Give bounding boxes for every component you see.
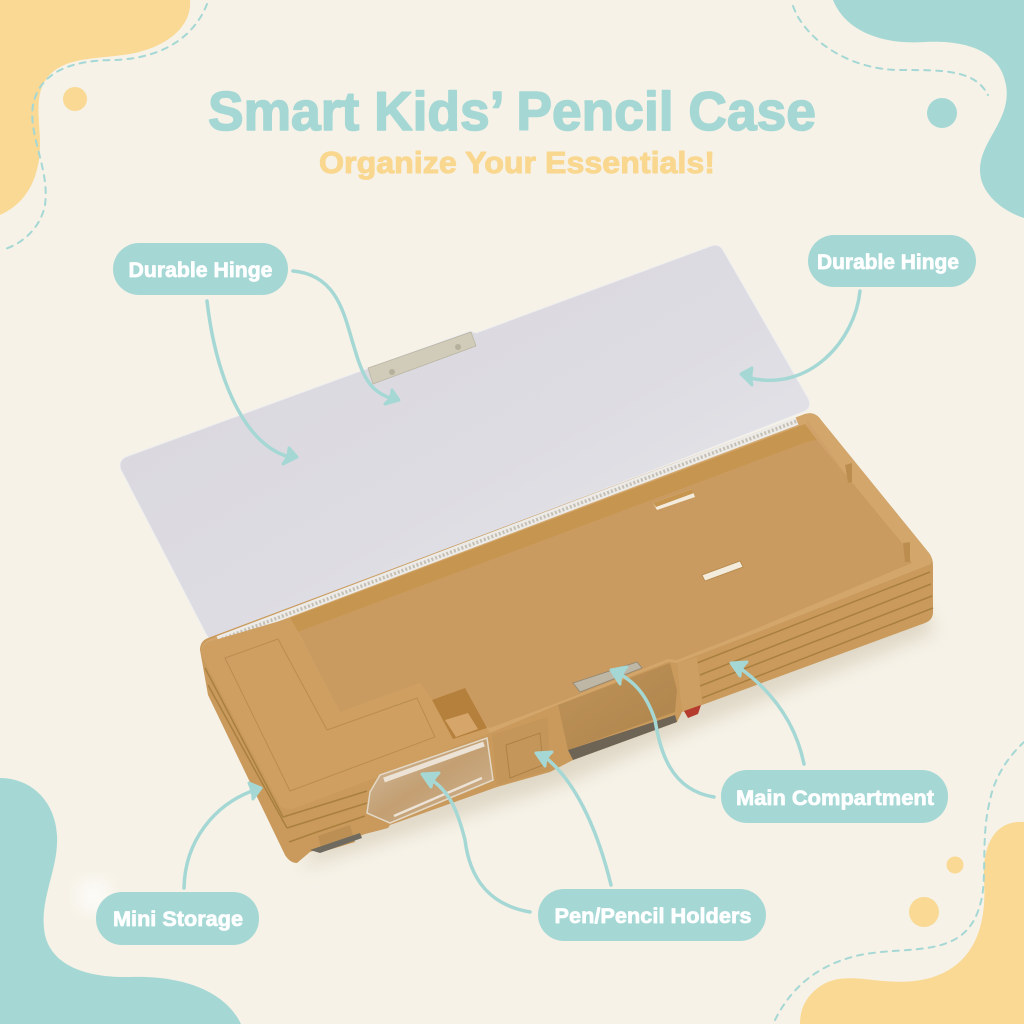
arrow: hinge left to plate [293,271,399,404]
notch opening [432,688,487,739]
metal clip [573,662,642,692]
title: Smart Kids’ Pencil Case [208,80,816,142]
arrow: hinge left to lid [207,301,297,464]
dashed line: top left [2,4,207,250]
arrow: main compartment to clip [611,667,714,797]
L-block inset [225,639,435,791]
arrow: mini storage to corner [184,783,261,888]
arrow: pen holders to clear clip [422,773,530,912]
label: durable hinge left [113,243,288,295]
label: mini storage [96,892,259,945]
right inner wall [807,420,910,563]
middle front block [558,663,677,750]
slot: back notch [653,489,695,510]
ridged section left column [677,657,702,712]
blob: bottom left [0,778,241,1024]
dot: bottom right large [909,897,939,927]
blob: top right [833,0,1024,218]
L-shaped block [202,618,490,809]
case top rim [201,413,932,809]
hinge teeth strip [218,421,797,640]
dashed line: bottom right lower [775,742,1024,1020]
wall notch step [653,489,694,507]
open lid [120,245,810,640]
subtitle: Organize Your Essentials! [319,145,715,180]
storage recess on corner [318,825,355,852]
label: pen/pencil holders: Pen/Pencil Holders [554,905,752,928]
red tab [684,705,701,718]
dot: bottom right small [946,856,964,874]
arrow: hinge right to lid [741,291,860,385]
slot: floor [702,561,743,581]
dark metal slot [568,715,677,760]
clear clip [367,738,493,823]
dashed line: top right [793,6,988,95]
hinge plate [368,332,476,384]
ridges: left front corner [205,668,367,842]
bottom metal [310,833,362,853]
label: main compartment [721,770,948,823]
arrow: main compartment to ridges [731,662,804,764]
case shadow [300,600,935,868]
label: pen/pencil holders [538,889,766,941]
inner rails right [845,463,852,483]
dot: top left [63,87,87,111]
pencil case product photo [120,245,935,868]
case outer body [200,413,933,863]
second front block [492,717,550,785]
label: main compartment: Main Compartment [736,787,934,810]
blob: top left [0,0,190,215]
label: durable hinge right [808,235,976,287]
arrow: pen holders to front block [536,752,611,885]
label: mini storage: Mini Storage [113,908,243,931]
label: durable hinge left: Durable Hinge [128,259,272,282]
ridges: right front [697,572,933,698]
dot: top right [927,98,957,128]
main compartment floor [298,440,912,728]
glow on bottom left blob [77,879,111,913]
back wall [290,424,817,632]
blob: bottom right [800,822,1024,1024]
label: durable hinge right: Durable Hinge [817,251,959,274]
